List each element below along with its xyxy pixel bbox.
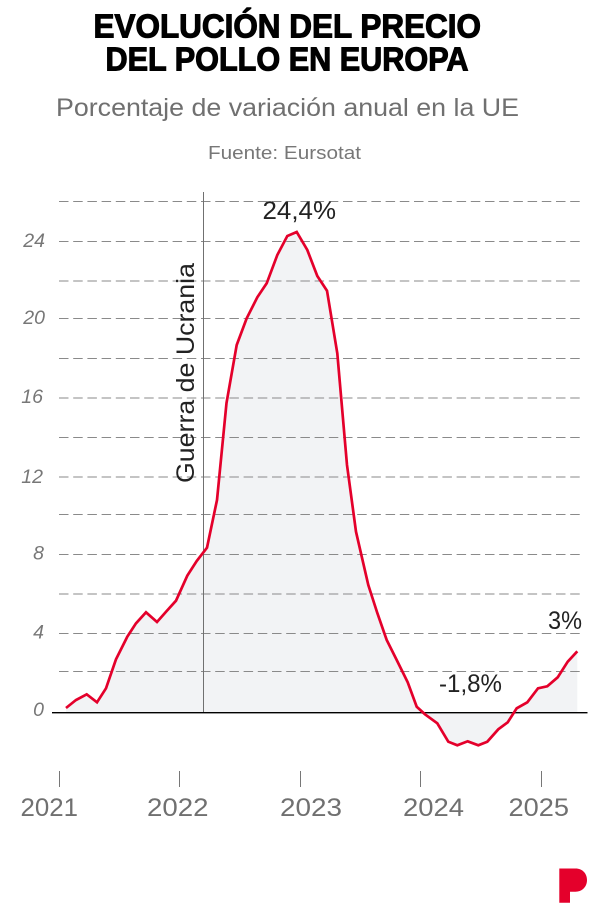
title: DEL POLLO EN EUROPA: [106, 41, 468, 78]
title: EVOLUCIÓN DEL PRECIO: [94, 7, 481, 44]
x axis labels: [20, 794, 569, 822]
y axis labels: 16: [21, 386, 43, 408]
x axis labels: 2021: [20, 794, 78, 822]
grid lines: [59, 202, 582, 672]
x axis labels: 2025: [508, 794, 569, 822]
callout: peak: 24,4%: [262, 197, 336, 225]
area fill under curve: [66, 232, 577, 745]
x axis labels: 2023: [280, 794, 342, 822]
y axis labels: 12: [21, 466, 43, 488]
icon: logo: [559, 868, 587, 903]
y axis labels: 20: [22, 307, 45, 329]
subtitle: Porcentaje de variación anual en la UE: [56, 94, 519, 122]
y axis labels: 24: [22, 230, 45, 252]
source: Fuente: Eursotat: [208, 143, 361, 163]
callout: latest: 3%: [548, 607, 582, 635]
x axis labels: 2024: [403, 794, 464, 822]
price line: [66, 232, 577, 745]
y axis labels: 4: [33, 622, 44, 644]
y axis labels: [21, 230, 45, 721]
x axis labels: 2022: [147, 794, 208, 822]
y axis labels: 0: [33, 699, 44, 721]
x axis ticks: [60, 771, 542, 787]
y axis labels: 8: [33, 542, 44, 564]
title: [94, 7, 481, 78]
zero axis: [52, 712, 588, 714]
marker: war in Ukraine: Guerra de Ucrania: [172, 263, 200, 483]
callout: low: -1,8%: [439, 670, 502, 698]
